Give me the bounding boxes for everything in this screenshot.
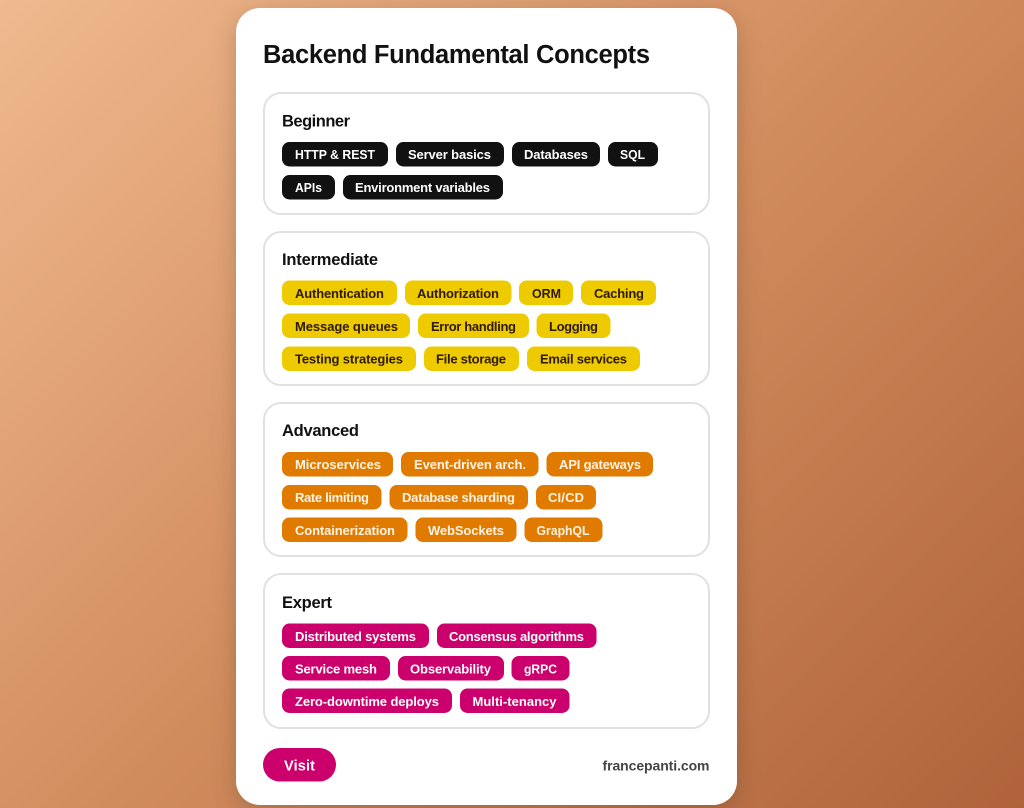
chip: CI/CD: CI/CD bbox=[548, 490, 584, 505]
chip: Rate limiting: Rate limiting bbox=[295, 490, 369, 505]
chip: Caching bbox=[581, 280, 656, 305]
chip: Distributed systems bbox=[282, 624, 429, 648]
chip: GraphQL bbox=[524, 518, 602, 542]
chip: Containerization bbox=[282, 518, 408, 542]
heading: advanced: Advanced bbox=[282, 422, 359, 440]
chip: Caching: Caching bbox=[594, 286, 644, 301]
chip: Environment variables bbox=[343, 175, 503, 200]
chip: Consensus algorithms bbox=[437, 624, 596, 648]
panel: beginner bbox=[264, 93, 709, 214]
panel: advanced bbox=[264, 403, 709, 556]
heading: expert: Expert bbox=[282, 594, 332, 612]
chip: Rate limiting bbox=[282, 485, 382, 510]
chip: Multi-tenancy bbox=[460, 688, 570, 713]
chip: Authorization: Authorization bbox=[417, 286, 499, 301]
chip: Zero-downtime deploys bbox=[282, 688, 452, 713]
chip: Error handling bbox=[418, 314, 529, 338]
heading: intermediate: Intermediate bbox=[282, 251, 378, 269]
panel: expert bbox=[264, 574, 709, 728]
chip: Authentication: Authentication bbox=[295, 286, 384, 301]
chip: File storage: File storage bbox=[436, 352, 506, 366]
chip: Observability: Observability bbox=[410, 662, 492, 676]
chip: Logging: Logging bbox=[549, 319, 598, 334]
chip: Observability bbox=[398, 656, 504, 680]
chip: SQL bbox=[608, 142, 658, 166]
chip: Database sharding bbox=[390, 485, 528, 510]
chip: File storage bbox=[424, 346, 519, 371]
chip: Error handling: Error handling bbox=[431, 319, 516, 334]
chip: SQL: SQL bbox=[620, 147, 645, 162]
chip: WebSockets bbox=[416, 518, 516, 542]
visit button bbox=[263, 748, 336, 782]
chip: gRPC: gRPC bbox=[524, 662, 558, 676]
chip: Authentication bbox=[282, 280, 397, 305]
panel: intermediate bbox=[264, 232, 709, 385]
chip: gRPC bbox=[512, 656, 570, 680]
chip: Databases: Databases bbox=[524, 147, 588, 162]
heading: beginner: Beginner bbox=[282, 112, 351, 130]
chip: GraphQL: GraphQL bbox=[536, 523, 590, 538]
chip: Multi-tenancy: Multi-tenancy bbox=[472, 694, 557, 709]
title: Backend Fundamental Concepts bbox=[263, 41, 650, 69]
chip: Testing strategies bbox=[282, 346, 416, 371]
chip: Consensus algorithms: Consensus algorithms bbox=[449, 629, 584, 644]
chip: APIs: APIs bbox=[295, 180, 322, 195]
chip: Logging bbox=[536, 314, 610, 338]
chip: Zero-downtime deploys: Zero-downtime deploys bbox=[295, 694, 439, 709]
chip: HTTP & REST: HTTP & REST bbox=[295, 147, 375, 162]
chip: Event-driven arch.: Event-driven arch. bbox=[414, 457, 526, 472]
chip: API gateways bbox=[546, 452, 653, 476]
chip: Testing strategies: Testing strategies bbox=[295, 352, 403, 366]
chip: Distributed systems: Distributed systems bbox=[295, 629, 416, 644]
chip: Microservices: Microservices bbox=[295, 457, 381, 472]
card background bbox=[236, 8, 737, 805]
footer site label: francepanti.com bbox=[602, 758, 710, 774]
chip: Authorization bbox=[405, 280, 512, 305]
chip: Event-driven arch. bbox=[401, 452, 538, 476]
chip: CI/CD bbox=[536, 485, 596, 510]
chip: Service mesh: Service mesh bbox=[295, 662, 377, 676]
chip: API gateways: API gateways bbox=[559, 457, 641, 472]
chip: Containerization: Containerization bbox=[295, 523, 395, 538]
chip: Databases bbox=[512, 142, 600, 166]
chip: Database sharding: Database sharding bbox=[402, 490, 515, 505]
chip: Message queues: Message queues bbox=[295, 319, 398, 334]
visit button: Visit bbox=[284, 758, 315, 774]
chip: Environment variables: Environment variables bbox=[355, 180, 490, 195]
chip: Email services: Email services bbox=[540, 352, 627, 366]
chip: Service mesh bbox=[282, 656, 390, 680]
chip: Message queues bbox=[282, 314, 410, 338]
chip: WebSockets: WebSockets bbox=[428, 523, 504, 538]
chip: Email services bbox=[527, 346, 640, 371]
chip: Server basics bbox=[396, 142, 504, 166]
chip: HTTP & REST bbox=[282, 142, 388, 166]
chip: Microservices bbox=[282, 452, 393, 476]
chip: ORM: ORM bbox=[532, 286, 561, 301]
chip: APIs bbox=[282, 175, 335, 200]
chip: Server basics: Server basics bbox=[408, 147, 491, 162]
chip: ORM bbox=[519, 280, 573, 305]
